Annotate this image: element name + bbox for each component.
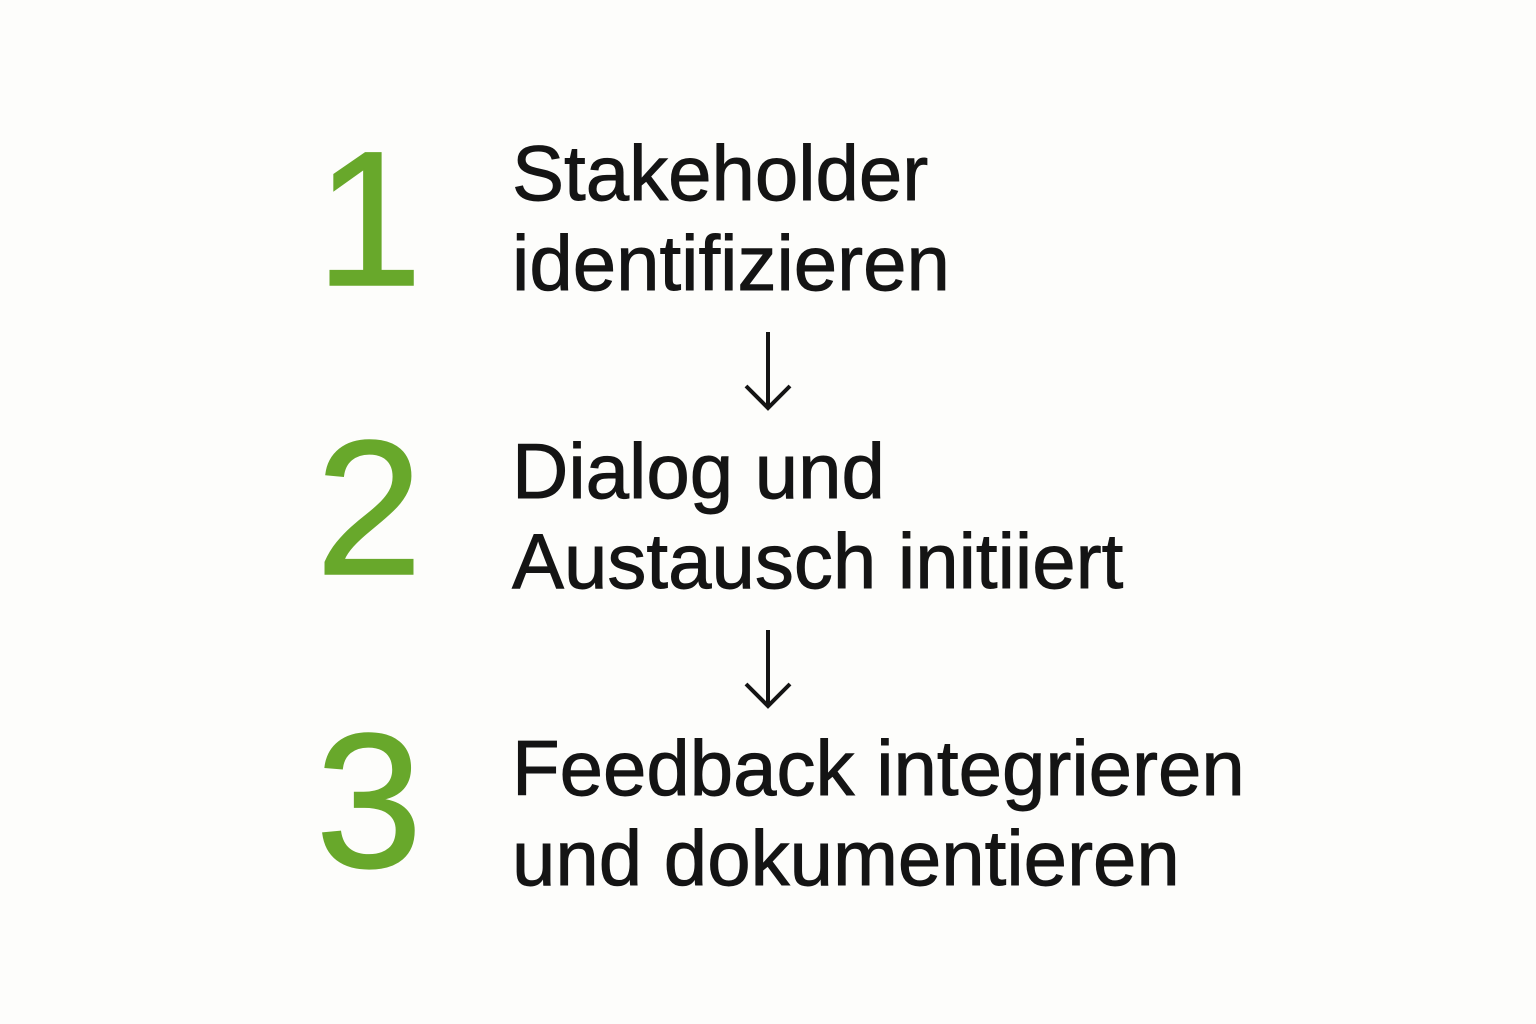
step 2 number: 2 (316, 400, 422, 615)
step 1 text: Stakeholder (512, 129, 928, 217)
step 3 text (512, 724, 1245, 902)
step 1 number: 1 (316, 111, 422, 326)
step 2 text: Austausch initiiert (512, 517, 1123, 605)
step 2 text: Dialog und (512, 427, 885, 515)
step 1 text (512, 129, 950, 307)
step 3 text: Feedback integrieren (512, 724, 1245, 812)
step 1 text: identifizieren (512, 219, 950, 307)
step 2 text (512, 427, 1124, 605)
arrow 2 (744, 630, 792, 709)
step 3 text: und dokumentieren (512, 814, 1180, 902)
step 3 number: 3 (316, 693, 422, 908)
arrow 1 (744, 332, 792, 411)
